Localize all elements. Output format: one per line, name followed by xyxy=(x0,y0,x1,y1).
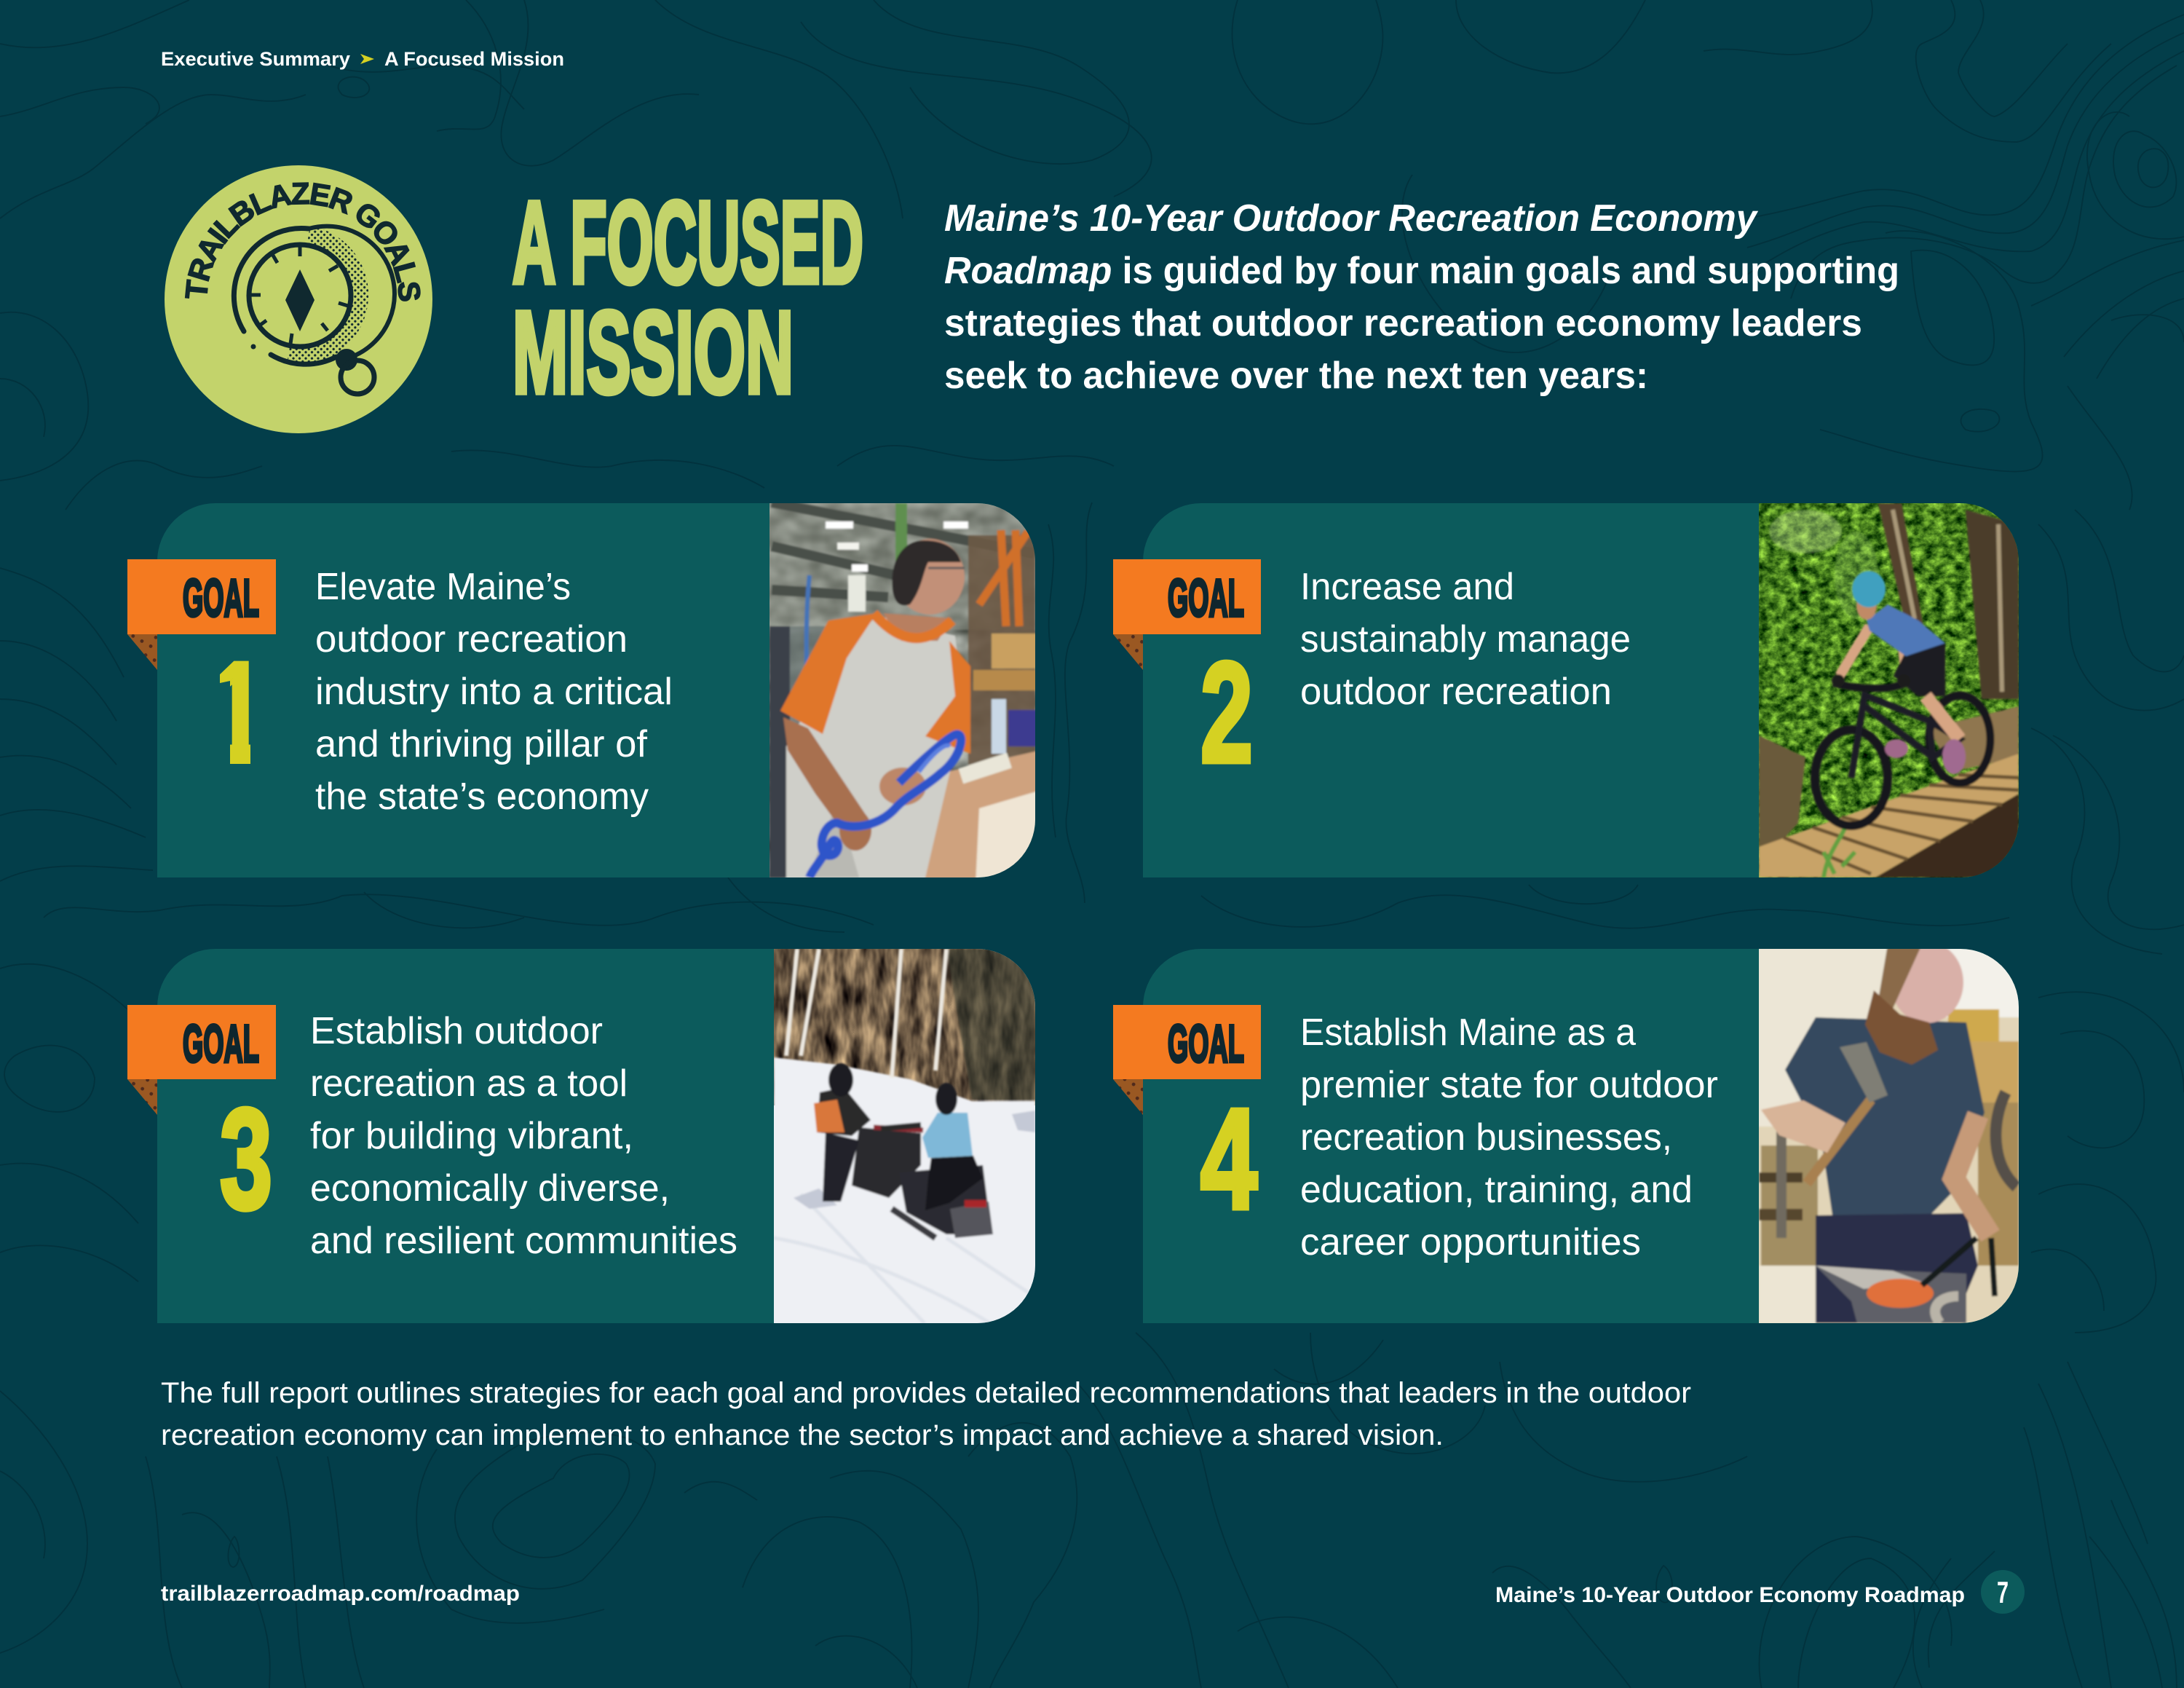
panel: goal 3 xyxy=(127,949,1035,1323)
goal 4 text: education, training, and xyxy=(1300,1169,1693,1211)
goal 2 photo: mountain biker on boardwalk xyxy=(1759,503,2019,877)
breadcrumb xyxy=(161,48,564,70)
goal 4 tag xyxy=(1113,1005,1261,1079)
goal 3 text: economically diverse, xyxy=(310,1167,670,1210)
closing paragraph: The full report outlines strategies for each goal and provides detailed recommendations that leaders in the outdoor xyxy=(161,1377,1691,1409)
goal 4 card xyxy=(1143,949,2019,1323)
intro text: Maine’s 10-Year Outdoor Recreation Economy xyxy=(944,197,1759,240)
page number xyxy=(1981,1570,2025,1614)
goal 1 tag label: GOAL xyxy=(183,569,259,628)
breadcrumb: Executive Summary xyxy=(161,48,350,70)
breadcrumb: A Focused Mission xyxy=(384,48,564,70)
goal 1 tag fold xyxy=(127,634,157,670)
intro text: seek to achieve over the next ten years: xyxy=(944,355,1648,397)
goal 4 number: 4 xyxy=(1200,1079,1257,1239)
badge: Trailblazer Goals compass xyxy=(165,165,432,433)
goal 1 photo: worker with rope in workshop xyxy=(764,499,1041,885)
intro text: Roadmap is guided by four main goals and supporting xyxy=(944,250,1899,292)
goal 4 text: premier state for outdoor xyxy=(1300,1064,1718,1106)
closing paragraph: recreation economy can implement to enhance the sector’s impact and achieve a shared vision. xyxy=(161,1419,1444,1451)
goal 2 text: outdoor recreation xyxy=(1300,671,1612,713)
heading: MISSION xyxy=(513,287,794,417)
goal 4 photo: blacksmith at anvil xyxy=(1754,942,2024,1330)
page number: 7 xyxy=(1997,1575,2009,1609)
goal 3 number: 3 xyxy=(220,1079,272,1239)
goal 1 tag xyxy=(127,559,276,634)
goal 1 text: and thriving pillar of xyxy=(315,723,648,765)
goal 2 tag fold xyxy=(1113,634,1143,670)
footer url: trailblazerroadmap.com/roadmap xyxy=(161,1582,520,1606)
goal 1 card xyxy=(157,503,1035,877)
footer title: Maine’s 10-Year Outdoor Economy Roadmap xyxy=(1495,1583,1965,1607)
goal 3 photo: snowmobilers on a trail xyxy=(774,949,1035,1323)
goal 2 text: sustainably manage xyxy=(1300,618,1631,660)
closing paragraph xyxy=(161,1377,1691,1451)
intro text xyxy=(944,197,1899,397)
goal 3 text xyxy=(310,1010,737,1262)
goal 3 text: for building vibrant, xyxy=(310,1115,633,1157)
panel: goal 2 xyxy=(1113,503,2019,877)
panel: goal 4 xyxy=(1113,942,2024,1330)
goal 2 tag label: GOAL xyxy=(1168,569,1244,628)
goal 1 text xyxy=(315,566,673,818)
heading: A FOCUSED xyxy=(513,177,863,307)
panel: goal 1 xyxy=(127,499,1041,885)
goal 3 card xyxy=(157,949,1035,1323)
goal 3 text: and resilient communities xyxy=(310,1220,737,1262)
intro text: strategies that outdoor recreation economy leaders xyxy=(944,302,1862,344)
goal 3 tag fold xyxy=(127,1079,157,1115)
goal 2 text xyxy=(1300,566,1631,713)
goal 4 text: recreation businesses, xyxy=(1300,1116,1672,1159)
goal 4 tag label: GOAL xyxy=(1168,1015,1244,1073)
goal 4 text xyxy=(1300,1011,1718,1263)
goal 1 text: Elevate Maine’s xyxy=(315,566,571,608)
goal 2 text: Increase and xyxy=(1300,566,1514,608)
goal 1 number: 1 xyxy=(211,633,265,792)
goal 4 text: Establish Maine as a xyxy=(1300,1011,1636,1054)
goal 3 text: Establish outdoor xyxy=(310,1010,603,1052)
goal 4 tag fold xyxy=(1113,1079,1143,1115)
goal 2 card xyxy=(1143,503,2019,877)
goal 1 text: industry into a critical xyxy=(315,671,673,713)
goal 4 text: career opportunities xyxy=(1300,1221,1641,1263)
goal 1 text: the state’s economy xyxy=(315,776,649,818)
goal 2 tag xyxy=(1113,559,1261,634)
goal 3 tag xyxy=(127,1005,276,1079)
goal 3 tag label: GOAL xyxy=(183,1015,259,1073)
badge: Trailblazer Goals compass: TRAILBLAZER GOALS xyxy=(185,182,421,301)
goal 3 text: recreation as a tool xyxy=(310,1062,628,1105)
goal 2 number: 2 xyxy=(1200,633,1253,792)
goal 1 text: outdoor recreation xyxy=(315,618,628,660)
heading xyxy=(513,177,863,417)
